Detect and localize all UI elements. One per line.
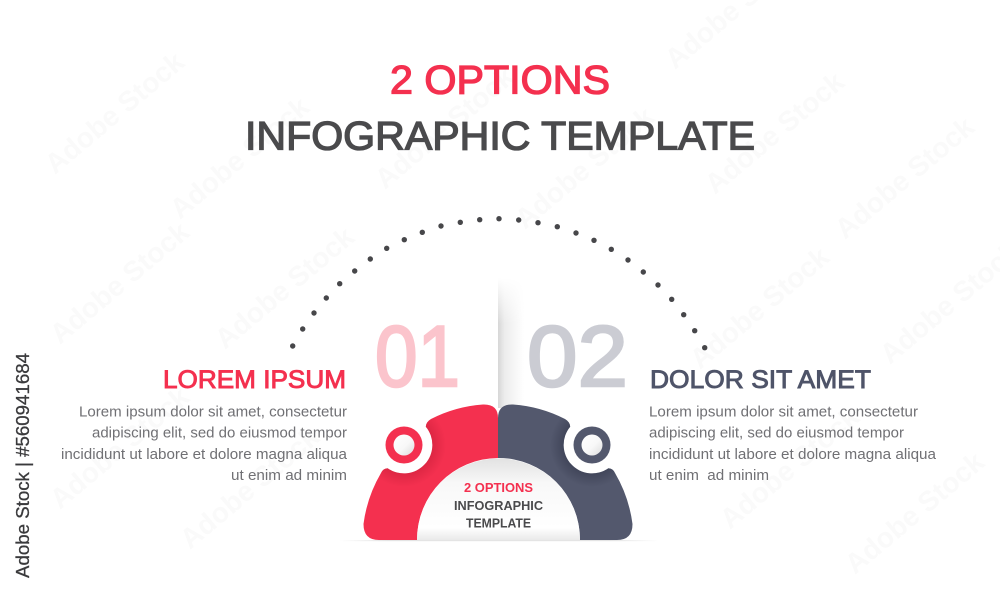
heading: lorem ipsum: LOREM IPSUM: [163, 366, 346, 394]
watermark: Adobe Stock: [699, 66, 850, 200]
body text: option 2: incididunt ut labore et dolore magna aliqua: [649, 447, 937, 463]
center label line 3: TEMPLATE: [466, 516, 531, 530]
icon: red ring: [386, 426, 422, 464]
center label line 2: INFOGRAPHIC: [454, 499, 543, 513]
semicircle segment 2: slate: [498, 403, 634, 540]
watermark: Adobe Stock: [209, 221, 360, 355]
stock id side text: Adobe Stock | #560941684: [12, 353, 33, 578]
watermark: Adobe Stock: [829, 111, 980, 245]
number 01: 01: [375, 309, 460, 405]
body text: option 1: adipiscing elit, sed do eiusmod tempor: [92, 426, 347, 442]
center fold shadow: [498, 288, 516, 408]
option 2 text block: [649, 366, 937, 484]
body text: option 2: Lorem ipsum dolor sit amet, consectetur: [649, 404, 918, 420]
watermark: Adobe Stock: [839, 446, 990, 580]
semicircle segment 1: red: [362, 403, 498, 540]
center half disc: [417, 458, 580, 540]
body text: option 1: incididunt ut labore et dolore magna aliqua: [61, 447, 348, 463]
title line: 2 options: 2 OPTIONS: [390, 58, 610, 102]
watermark: Adobe Stock: [684, 241, 835, 375]
watermark: Adobe Stock: [369, 61, 520, 195]
watermark: Adobe Stock: [174, 421, 325, 555]
center label line 1: 2 OPTIONS: [464, 481, 533, 495]
body text: option 2: [649, 404, 937, 484]
option 1 text block: [61, 366, 348, 484]
watermark: Adobe Stock: [509, 101, 660, 235]
watermark: Adobe Stock: [44, 381, 195, 515]
body text: option 2: adipiscing elit, sed do eiusmod tempor: [649, 426, 904, 442]
watermark: Adobe Stock: [164, 91, 315, 225]
watermark: Adobe Stock: [44, 216, 195, 350]
body text: option 2: ut enim ad minim: [649, 468, 769, 484]
body text: option 1: Lorem ipsum dolor sit amet, consectetur: [79, 404, 347, 420]
heading: dolor sit amet: DOLOR SIT AMET: [650, 366, 871, 394]
icon: slate ring: [574, 426, 610, 464]
base line shadow: [340, 540, 658, 541]
title line: infographic template: INFOGRAPHIC TEMPLATE: [245, 114, 755, 158]
dotted arc: [290, 216, 707, 350]
body text: option 1: [61, 404, 348, 484]
title: [245, 58, 755, 158]
center label: [454, 481, 543, 530]
number 02: 02: [527, 309, 628, 405]
watermark: Adobe Stock: [39, 46, 190, 180]
body text: option 1: ut enim ad minim: [231, 468, 347, 484]
watermark: Adobe Stock: [714, 401, 865, 535]
